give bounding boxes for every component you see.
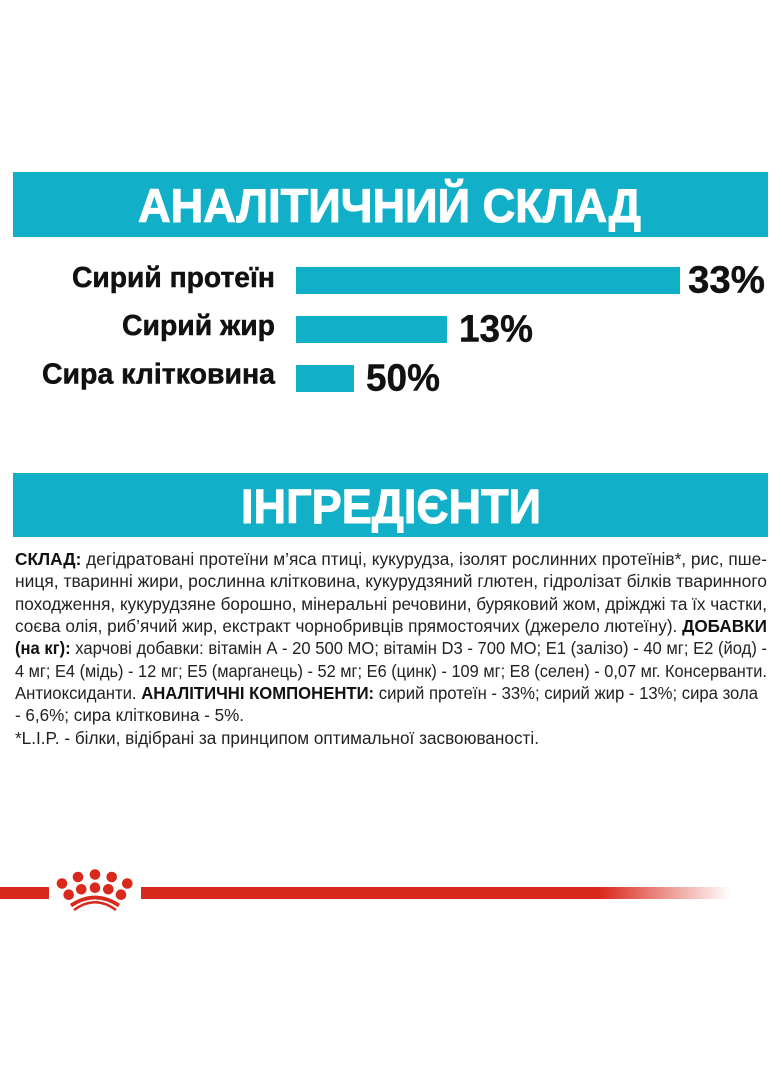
- heading banner: analytical composition: АНАЛІТИЧНИЙ СКЛАД: [138, 179, 641, 232]
- bar row: crude protein: Сирий протеїн: [72, 262, 275, 294]
- bar row: crude fibre: 50%: [366, 358, 440, 400]
- bar row: crude fibre: [42, 358, 440, 400]
- icon: royal crown logo: [57, 869, 133, 910]
- bar row: crude fat: 13%: [459, 308, 533, 350]
- text block: ingredients list: соєва олія, риб’ячий жир, екстракт чорнобривців прямостоячих (джерело лютеїну). ДОБАВКИ: [15, 616, 767, 636]
- bar chart: composition: [42, 260, 765, 400]
- text block: ingredients list: *L.I.P. - білки, відібрані за принципом оптимальної засвоюваності.: [15, 728, 539, 748]
- text block: ingredients list: - 6,6%; сира клітковина - 5%.: [15, 705, 244, 725]
- text block: ingredients list: (на кг): харчові добавки: вітамін А - 20 500 МО; вітамін D3 - 700 МО; Е1 (залізо) - 40 мг; Е2 (йод) -: [15, 638, 767, 658]
- panel: analytical composition: [13, 172, 768, 400]
- heading banner: analytical composition: [13, 172, 768, 237]
- text block: ingredients list: СКЛАД: дегідратовані протеїни м’яса птиці, кукурудза, ізолят рослинних протеїнів*, рис, пше-: [15, 549, 767, 569]
- text block: ingredients list: ниця, тваринні жири, рослинна клітковина, кукурудзяний глютен, гідролізат білків тваринного: [15, 571, 767, 591]
- text block: ingredients list: [15, 549, 767, 748]
- bar row: crude fat: Сирий жир: [122, 310, 275, 342]
- bar row: crude fat: [122, 308, 533, 350]
- bar row: crude fibre: Сира клітковина: [42, 358, 276, 390]
- bar row: crude protein: 33%: [688, 260, 765, 302]
- panel: ingredients: [13, 473, 768, 748]
- heading banner: ingredients: [13, 473, 768, 537]
- heading banner: ingredients: ІНГРЕДІЄНТИ: [241, 481, 541, 534]
- footer brand divider: [0, 869, 731, 910]
- bar row: crude protein: [72, 260, 765, 302]
- text block: ingredients list: Антиоксиданти. АНАЛІТИЧНІ КОМПОНЕНТИ: сирий протеїн - 33%; сирий жир - 13%; сира зола: [15, 683, 758, 703]
- text block: ingredients list: походження, кукурудзяне борошно, мінеральні речовини, буряковий жом, дріжджі та їх частки,: [15, 594, 767, 614]
